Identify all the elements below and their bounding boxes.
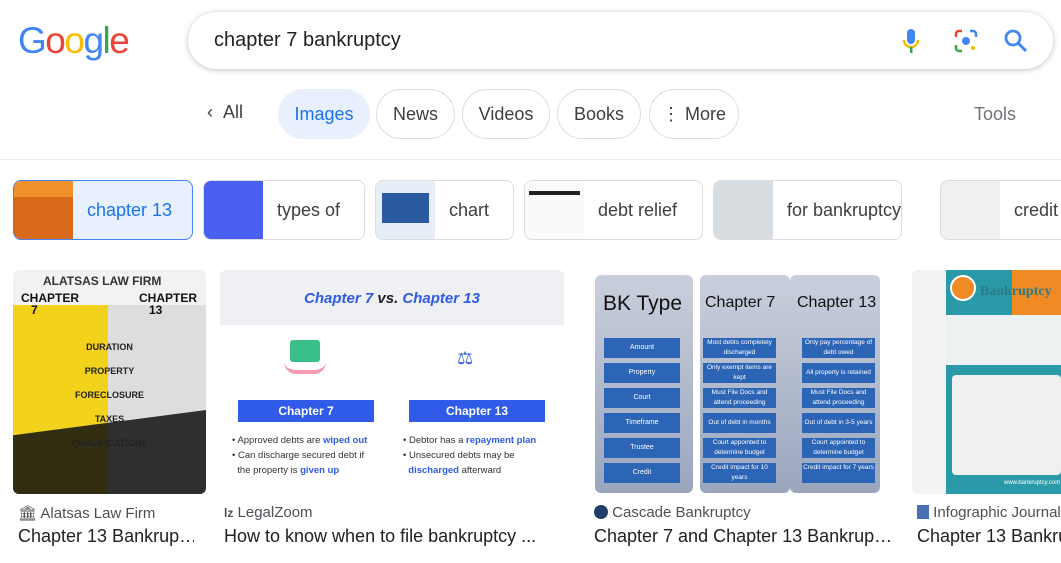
text: News	[393, 104, 438, 124]
result 3: Cascade chart image: Amount	[630, 344, 654, 351]
result 3: Cascade chart image: Court appointed to determine budget	[713, 439, 766, 456]
result 3: Cascade chart image: Must File Docs and attend proceeding	[712, 389, 767, 406]
result 3: Cascade chart image: Credit impact for 7 years	[803, 464, 874, 471]
icon: lens	[954, 30, 978, 52]
result 3: Cascade chart image: Property	[629, 369, 655, 376]
result 1: Alatsas image: QUALIFICATIONS	[72, 438, 147, 448]
result 3: Cascade chart image	[590, 270, 884, 494]
result 3: Cascade chart image: Chapter 13	[797, 294, 876, 311]
result 4: infographic image: Bankruptcy	[980, 284, 1052, 299]
text: Cascade Bankruptcy	[612, 504, 751, 521]
result 3: Cascade chart image: Only pay percentage of debt owed	[805, 339, 872, 356]
result 3: Cascade chart image: Out of debt in months	[708, 419, 771, 426]
result 1: Alatsas image: CHAPTER	[139, 291, 197, 305]
result 2: LegalZoom image: ⚖	[457, 348, 473, 368]
text: Videos	[479, 104, 533, 124]
text: Chapter 7 and Chapter 13 Bankrup…	[594, 526, 892, 546]
chips row: chart	[449, 200, 489, 220]
result 3: Cascade chart image: BK Type	[603, 292, 682, 315]
icon: mic	[902, 29, 920, 53]
result 3: Cascade chart image: Credit	[633, 469, 651, 476]
result 2: LegalZoom image: • Unsecured debts may be	[403, 450, 515, 461]
result 4: infographic image: www.bankruptcy.com	[1004, 480, 1060, 486]
text: How to know when to file bankruptcy ...	[224, 526, 536, 546]
logo: Google: Google	[18, 20, 128, 61]
result 1: Alatsas image: PROPERTY	[85, 366, 134, 376]
result 1: Alatsas image: ALATSAS LAW FIRM	[43, 274, 161, 288]
result 2: LegalZoom image: • Can discharge secured debt if	[232, 450, 364, 461]
result 3: Cascade chart image: Chapter 7	[705, 294, 775, 311]
chips row: types of	[277, 200, 340, 220]
search box	[188, 12, 1053, 69]
result 2: LegalZoom image	[220, 270, 564, 494]
chips row: chapter 13	[87, 200, 172, 220]
result 3: Cascade chart image: Must File Docs and attend proceeding	[811, 389, 866, 406]
result 3: Cascade chart image: Timeframe	[625, 419, 659, 426]
search box: chapter 7 bankruptcy	[214, 29, 401, 51]
result 3: Cascade chart image: All property is retained	[806, 369, 871, 376]
result 3: Cascade chart image: Trustee	[630, 444, 654, 451]
chips row	[13, 180, 1061, 240]
result 2: LegalZoom image: Chapter 7 vs. Chapter 13	[304, 290, 480, 307]
result 3: Cascade chart image: Out of debt in 3-5 years	[805, 419, 872, 426]
result 1: Alatsas image: 13	[149, 303, 162, 317]
result 4: infographic image	[912, 270, 1061, 494]
text: Infographic Journal	[933, 504, 1061, 521]
text: lz LegalZoom	[224, 504, 313, 521]
result 2: LegalZoom image: the property is given up	[237, 465, 339, 476]
result 3: Cascade chart image: Court appointed to determine budget	[812, 439, 865, 456]
text: Chapter 13 Bankrup…	[18, 526, 194, 546]
result 2: LegalZoom image: discharged afterward	[408, 465, 501, 476]
result 2: LegalZoom image: Chapter 7	[278, 404, 334, 418]
tabs row: ‹ All	[207, 102, 243, 122]
captions: 🏛 Alatsas Law Firm	[18, 505, 155, 522]
result 1: Alatsas image: 7	[31, 303, 38, 317]
result 2: LegalZoom image: • Debtor has a repayment plan	[403, 435, 536, 446]
text: ⋮ More	[662, 104, 726, 124]
chips row: for bankruptcy	[787, 200, 901, 220]
result 3: Cascade chart image: Credit impact for 10 years	[711, 464, 768, 481]
result 1: Alatsas image: DURATION	[86, 342, 133, 352]
icon: search	[1004, 30, 1027, 52]
chips row: credit	[1014, 200, 1058, 220]
result 1: Alatsas image: TAXES	[95, 414, 124, 424]
result 2: LegalZoom image: • Approved debts are wiped out	[232, 435, 367, 446]
result 1: Alatsas image	[13, 270, 206, 494]
text: Tools	[974, 104, 1016, 124]
result 1: Alatsas image: CHAPTER	[21, 291, 79, 305]
result 2: LegalZoom image: Chapter 13	[446, 404, 508, 418]
chips row: debt relief	[598, 200, 677, 220]
text: Books	[574, 104, 624, 124]
text: Images	[294, 104, 354, 124]
result 3: Cascade chart image: Court	[633, 394, 651, 401]
result 1: Alatsas image: FORECLOSURE	[75, 390, 144, 400]
result 3: Cascade chart image: Only exempt items are kept	[707, 364, 772, 381]
result 3: Cascade chart image: Most debts completely discharged	[707, 339, 772, 356]
